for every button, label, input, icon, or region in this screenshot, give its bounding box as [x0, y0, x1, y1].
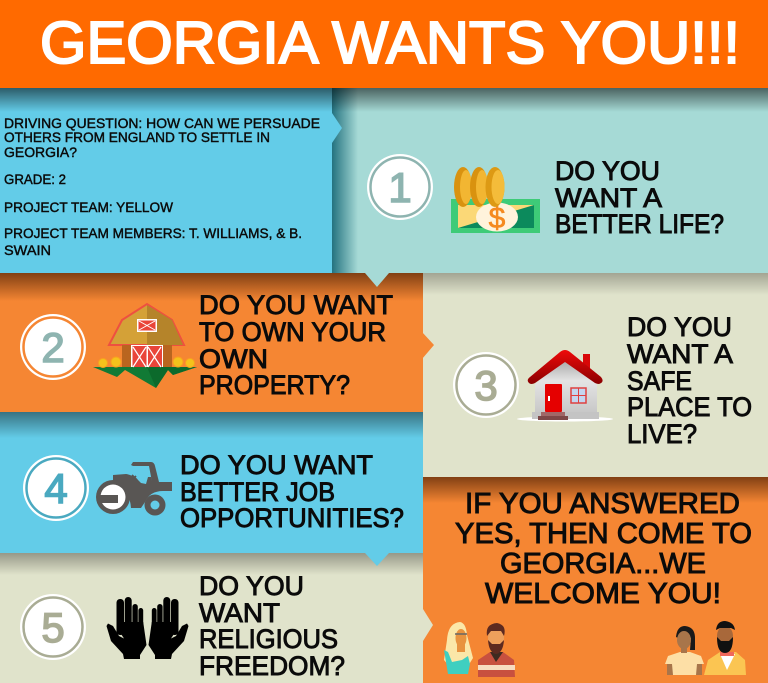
- text: question 3: SAFE: [627, 366, 692, 396]
- text block: project details: PROJECT TEAM: YELLOW: [4, 200, 173, 215]
- text: question 2: OWN: [199, 344, 268, 374]
- text: question 3: LIVE?: [627, 419, 697, 449]
- icon: man with black beard and bow tie: [704, 621, 746, 675]
- panel: question 5: [0, 553, 423, 683]
- title: GEORGIA WANTS YOU!!!: [40, 10, 740, 76]
- text: closing message: WELCOME YOU!: [485, 578, 721, 610]
- panel: closing invitation: [423, 477, 768, 683]
- text: question 4: DO YOU WANT: [180, 450, 373, 480]
- badge: number 4: 4: [44, 465, 68, 512]
- panel: question 1: [332, 88, 768, 274]
- text: question 1: WANT A: [555, 183, 662, 213]
- header banner: [0, 0, 768, 88]
- icon: coins and banknote: $: [489, 202, 506, 235]
- icon: woman with dark hair: [665, 626, 704, 675]
- text: question 4: BETTER JOB: [180, 477, 335, 507]
- text: question 3: PLACE TO: [627, 392, 752, 422]
- badge: number 5: [20, 594, 86, 660]
- text: question 5: FREEDOM?: [199, 651, 345, 681]
- text block: project details: DRIVING QUESTION: HOW CAN WE PERSUADE: [4, 116, 320, 131]
- badge: number 1: [367, 154, 433, 220]
- icon: barn: [93, 304, 197, 388]
- text: question 1: [555, 156, 724, 239]
- icon: man with beard and sweater: [478, 623, 515, 677]
- badge: number 5: 5: [41, 604, 65, 651]
- text block: project details: OTHERS FROM ENGLAND TO SETTLE IN: [4, 130, 270, 145]
- icon: house: [517, 350, 613, 422]
- text: question 5: DO YOU: [199, 571, 304, 601]
- text: closing message: IF YOU ANSWERED: [465, 488, 740, 520]
- badge: number 2: 2: [41, 324, 65, 371]
- panel: question 3: [423, 273, 768, 477]
- text block: project details: GEORGIA?: [4, 145, 77, 160]
- panel: question 4: [0, 412, 423, 566]
- icon: tractor: [96, 462, 172, 516]
- text: question 3: [627, 312, 752, 449]
- text block: project details: PROJECT TEAM MEMBERS: T. WILLIAMS, & B.: [4, 226, 302, 241]
- panel: driving question: [0, 88, 342, 274]
- badge: number 2: [20, 314, 86, 380]
- icon: coins and banknote: [451, 167, 540, 235]
- badge: number 3: 3: [474, 362, 498, 409]
- text: question 2: PROPERTY?: [199, 370, 350, 400]
- text: question 2: DO YOU WANT: [199, 290, 393, 320]
- text: question 4: [180, 450, 404, 533]
- icon: woman with blonde hair: [444, 622, 473, 674]
- text: question 2: [199, 290, 393, 400]
- text block: project details: GRADE: 2: [4, 172, 66, 187]
- text: closing message: YES, THEN COME TO: [455, 518, 752, 550]
- text block: project details: [4, 116, 320, 258]
- text: question 3: DO YOU: [627, 312, 732, 342]
- badge: number 4: [23, 455, 89, 521]
- badge: number 3: [453, 352, 519, 418]
- text: question 5: WANT: [199, 598, 280, 628]
- badge: number 1: 1: [388, 164, 412, 211]
- text: closing message: GEORGIA...WE: [500, 548, 706, 580]
- text: question 5: RELIGIOUS: [199, 624, 338, 654]
- text: question 5: [199, 571, 345, 681]
- text: question 1: DO YOU: [555, 156, 660, 186]
- text: question 3: WANT A: [627, 339, 733, 369]
- text: closing message: [455, 488, 752, 610]
- text: question 4: OPPORTUNITIES?: [180, 503, 404, 533]
- panel: question 2: [0, 273, 434, 412]
- text: question 1: BETTER LIFE?: [555, 209, 724, 239]
- text block: project details: SWAIN: [4, 243, 51, 258]
- icon: open hands: [106, 597, 188, 659]
- text: question 2: TO OWN YOUR: [199, 317, 386, 347]
